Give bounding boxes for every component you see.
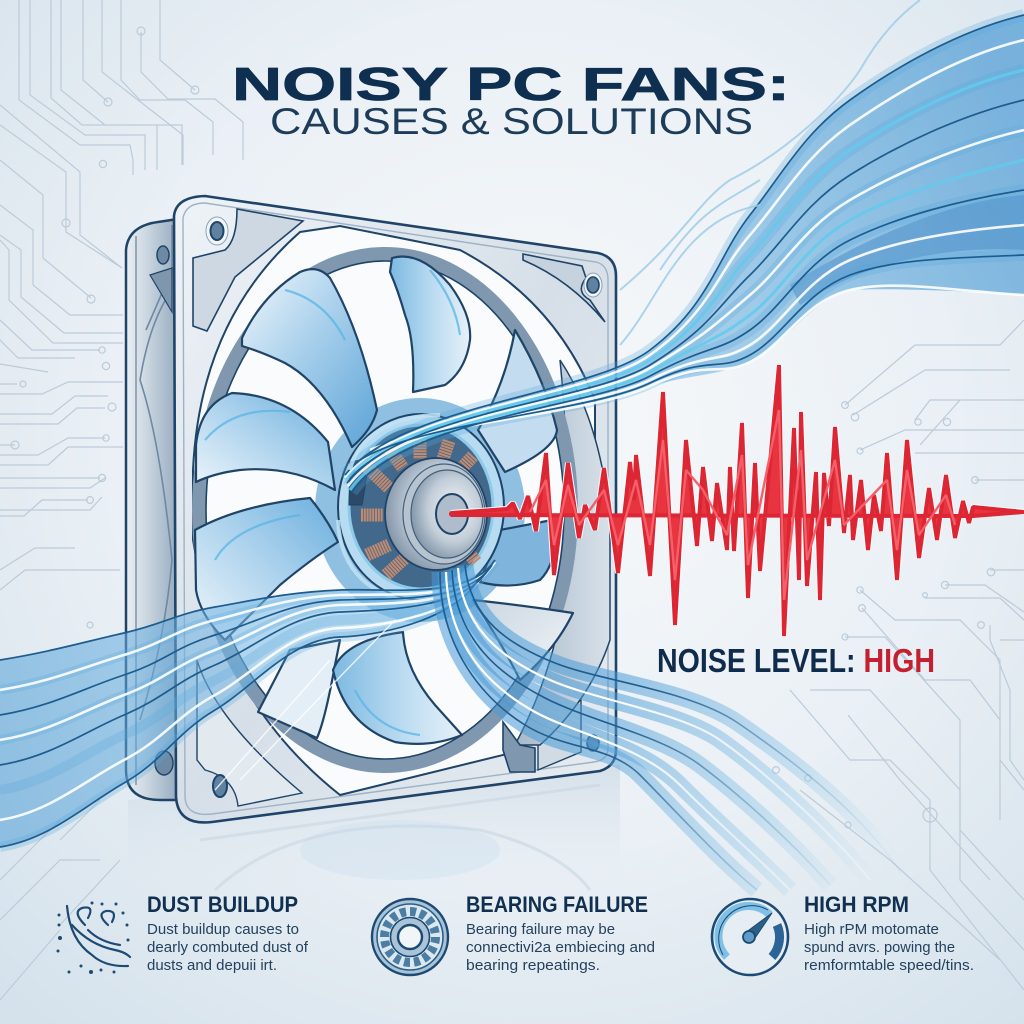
motor housing ring — [338, 414, 504, 600]
blade: bottom — [333, 632, 462, 744]
heading: HIGH RPM — [804, 892, 909, 917]
clip connector — [503, 722, 535, 772]
cause: dust buildup — [56, 892, 309, 974]
icon: ball bearing — [372, 899, 448, 975]
waveform white halo — [451, 365, 1024, 636]
cause: high rpm — [712, 892, 974, 975]
blade: lower left — [195, 498, 338, 640]
cause: bearing failure — [372, 892, 655, 975]
body: connectivi2a embiecing and — [466, 940, 655, 956]
frame corner gussets and screw holes — [193, 209, 605, 806]
title line 1: NOISY PC FANS: — [232, 58, 790, 110]
fan assembly — [126, 196, 616, 822]
icon: dust swirls — [56, 902, 130, 974]
back frame — [126, 219, 178, 800]
waveform inner band — [530, 410, 955, 600]
motor hub — [338, 414, 504, 600]
hub body — [385, 458, 487, 570]
airflow stream: lower right — [440, 565, 901, 890]
body: High rPM motomate — [804, 922, 939, 938]
body — [466, 922, 655, 974]
body: Dust buildup causes to — [147, 922, 299, 938]
airflow stream: left — [0, 560, 495, 847]
body: spund avrs. powing the — [804, 940, 955, 956]
body: bearing repeatings. — [466, 958, 600, 974]
heading: DUST BUILDUP — [147, 892, 298, 917]
blade: lower right — [473, 600, 573, 680]
body: Bearing failure may be — [466, 922, 615, 938]
heading: BEARING FAILURE — [466, 892, 648, 917]
icon: speed gauge — [712, 899, 788, 975]
fan blades — [195, 257, 573, 744]
blade: top — [390, 257, 470, 392]
body: dusts and depuii irt. — [147, 958, 277, 974]
blade: upper right — [478, 330, 557, 472]
title line 2: CAUSES & SOLUTIONS — [270, 101, 753, 142]
front frame — [174, 196, 616, 822]
noise waveform — [451, 365, 1024, 636]
circuit traces: left — [0, 0, 243, 1000]
blade: bottom sliver — [258, 640, 340, 738]
circuit traces: right — [773, 320, 1024, 990]
floor reflection of fan — [128, 765, 620, 890]
body — [804, 922, 974, 974]
blade: top left — [242, 269, 377, 447]
body: remformtable speed/tins. — [804, 958, 974, 974]
blade: right — [480, 520, 554, 586]
airflow stream: upper right — [338, 0, 1024, 605]
body: dearly combuted dust of — [147, 940, 309, 956]
fan opening and duct ring — [193, 226, 610, 795]
blade: left — [196, 393, 335, 490]
body — [147, 922, 309, 974]
noise level label: NOISE LEVEL: HIGH — [657, 642, 935, 679]
blade highlights — [205, 270, 460, 735]
waveform fill — [451, 365, 1024, 636]
copper coils — [361, 439, 476, 575]
